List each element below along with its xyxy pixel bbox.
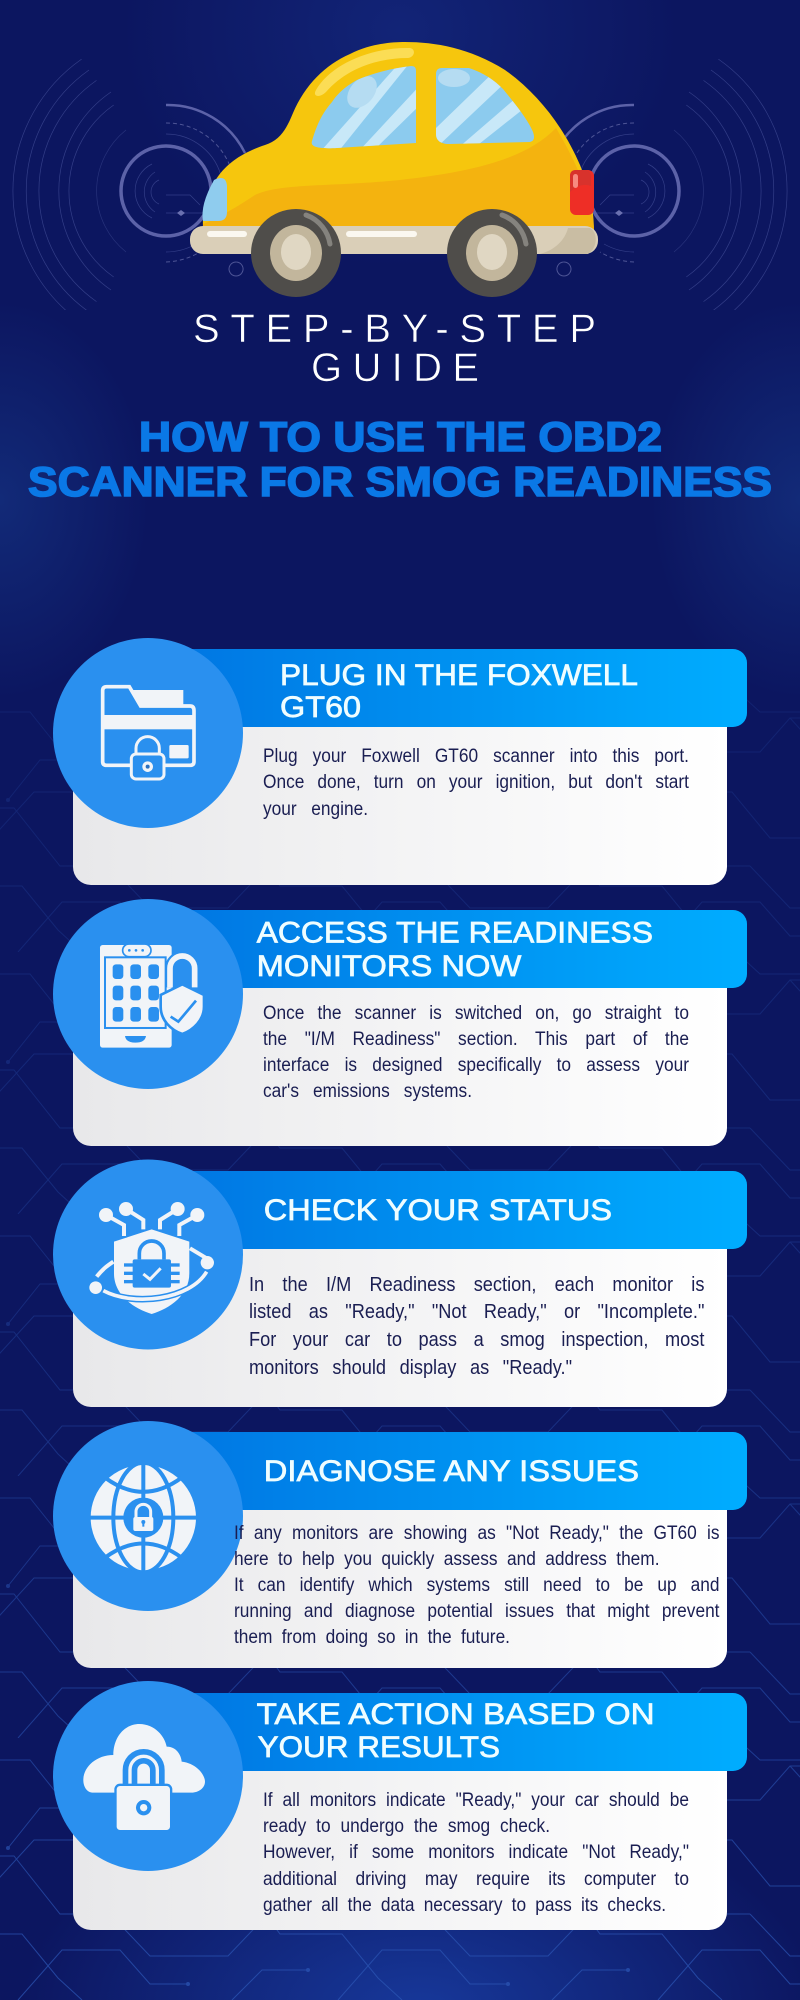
icon: globe with lock xyxy=(88,1463,198,1573)
step 1 heading xyxy=(280,659,638,724)
subtitle: step-by-step guide: GUIDE xyxy=(311,346,479,390)
icon: shield lock circuit xyxy=(89,1202,214,1314)
step 4 body text: running and diagnose potential issues that might prevent xyxy=(234,1601,719,1622)
panel: step 3 check status xyxy=(53,1160,747,1407)
step 1 heading: GT60 xyxy=(280,691,361,724)
step 2 heading: ACCESS THE READINESS xyxy=(257,916,653,949)
step 2 body text xyxy=(263,1003,689,1102)
step 1 body text: your engine. xyxy=(263,799,368,820)
panel: step 2 readiness monitors xyxy=(53,899,747,1146)
step 1 heading: PLUG IN THE FOXWELL xyxy=(280,659,638,692)
step 1 body text xyxy=(263,746,689,820)
step 1 body text: Plug your Foxwell GT60 scanner into this port. xyxy=(263,746,689,767)
main title: SCANNER FOR SMOG READINESS xyxy=(28,458,772,505)
step 3 body text: listed as "Ready," "Not Ready," or "Incomplete." xyxy=(248,1301,704,1323)
panel: step 4 diagnose issues xyxy=(53,1421,747,1668)
step 5 body text: ready to undergo the smog check. xyxy=(263,1816,550,1837)
step 4 body text: If any monitors are showing as "Not Ready," the GT60 is xyxy=(234,1523,719,1544)
step 5 heading: YOUR RESULTS xyxy=(258,1731,500,1764)
step 3 body text: For your car to pass a smog inspection, most xyxy=(248,1329,704,1351)
subtitle: step-by-step guide: STEP-BY-STEP xyxy=(193,307,596,351)
subtitle: step-by-step guide xyxy=(193,307,596,390)
step 4 body text: It can identify which systems still need to be up and xyxy=(234,1575,719,1596)
step 4 heading: DIAGNOSE ANY ISSUES xyxy=(264,1455,639,1488)
step 5 body text: gather all the data necessary to pass its checks. xyxy=(263,1895,666,1916)
step 4 body text: them from doing so in the future. xyxy=(234,1627,510,1648)
step 5 body text: additional driving may require its computer to xyxy=(263,1869,689,1890)
main title: HOW TO USE THE OBD2 xyxy=(139,413,662,460)
step 3 body text: monitors should display as "Ready." xyxy=(248,1357,572,1379)
hero: car illustration with signal rings xyxy=(12,42,788,310)
step 5 body text xyxy=(263,1790,689,1916)
icon: folder with lock xyxy=(103,687,194,779)
car xyxy=(190,42,598,297)
step 3 body text xyxy=(248,1274,704,1379)
background circuit pattern xyxy=(0,700,800,2000)
step 5 body text: If all monitors indicate "Ready," your car should be xyxy=(263,1790,689,1811)
step 3 heading: CHECK YOUR STATUS xyxy=(264,1194,612,1227)
step 2 body text: car's emissions systems. xyxy=(263,1081,472,1102)
left signal rings xyxy=(13,59,272,323)
step 5 body text: However, if some monitors indicate "Not Ready," xyxy=(263,1842,689,1863)
right signal rings xyxy=(528,59,787,323)
wheels xyxy=(251,209,537,297)
step 2 heading: MONITORS NOW xyxy=(257,950,522,983)
panel: step 1 plug in xyxy=(53,638,747,885)
icon: cloud with lock xyxy=(83,1724,205,1830)
icon: phone with lock and shield xyxy=(100,944,204,1048)
step 2 body text: Once the scanner is switched on, go straight to xyxy=(263,1003,689,1024)
step 4 body text xyxy=(234,1523,720,1648)
panel: step 5 take action xyxy=(53,1681,747,1930)
main title xyxy=(28,413,772,505)
step 4 body text: here to help you quickly assess and address them. xyxy=(234,1549,660,1570)
step 2 heading xyxy=(257,916,653,983)
step 3 body text: In the I/M Readiness section, each monitor is xyxy=(248,1274,704,1296)
step 5 heading xyxy=(257,1698,655,1764)
step 5 heading: TAKE ACTION BASED ON xyxy=(257,1698,655,1731)
step 1 body text: Once done, turn on your ignition, but don't start xyxy=(263,772,689,793)
step 2 body text: the "I/M Readiness" section. This part of the xyxy=(263,1029,689,1050)
step 2 body text: interface is designed specifically to assess your xyxy=(263,1055,689,1076)
